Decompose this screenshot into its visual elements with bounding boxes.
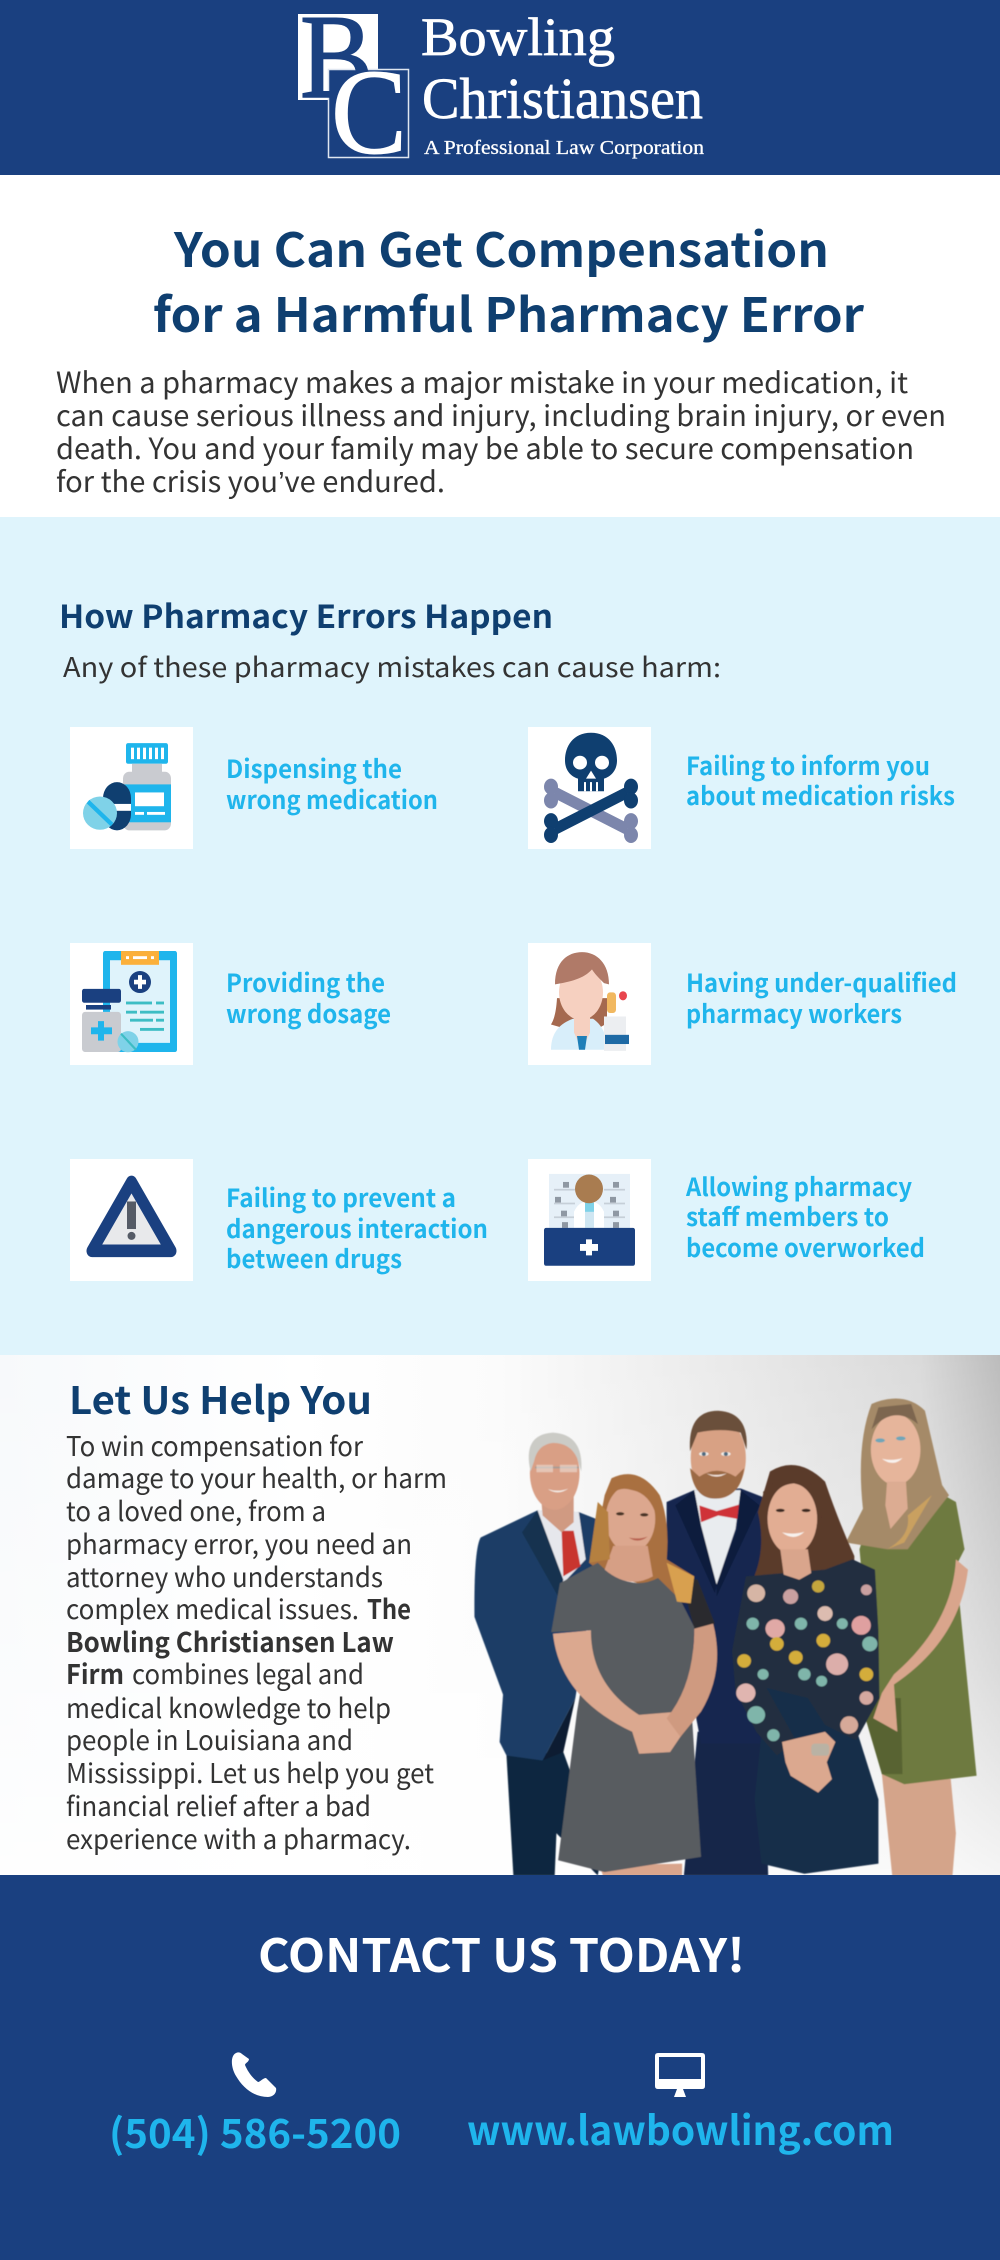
person: man with bow tie, back centre xyxy=(667,1411,768,1875)
item: under-qualified workers xyxy=(528,943,957,1065)
body text: Mississippi. Let us help you get xyxy=(66,1752,434,1791)
icon: pharmacist xyxy=(551,952,629,1051)
logo mark xyxy=(298,0,408,180)
section heading: How Pharmacy Errors Happen xyxy=(59,592,553,638)
item: providing the wrong dosage xyxy=(70,943,391,1065)
body text: To win compensation for xyxy=(66,1425,363,1464)
item text xyxy=(226,1179,488,1276)
body text: damage to your health, or harm xyxy=(66,1457,447,1496)
body text: experience with a pharmacy. xyxy=(66,1818,411,1857)
item text: Dispensing the xyxy=(226,750,402,786)
item text: between drugs xyxy=(226,1240,402,1276)
person: woman in green dress, right xyxy=(846,1399,977,1875)
header band xyxy=(0,0,1000,180)
panel: let us help you xyxy=(0,1355,1000,1875)
team photo illustration xyxy=(474,1398,978,1875)
item text: Failing to inform you xyxy=(686,747,930,783)
item text: dangerous interaction xyxy=(226,1210,488,1246)
icon: pharmacist at counter xyxy=(544,1174,635,1266)
item: dispensing the wrong medication xyxy=(70,727,438,849)
item text: pharmacy workers xyxy=(686,995,902,1031)
intro paragraph xyxy=(56,360,946,501)
person: older man, left xyxy=(474,1433,601,1875)
item text: Failing to prevent a xyxy=(226,1179,456,1215)
body text xyxy=(66,1425,447,1857)
item text: Having under-qualified xyxy=(686,964,957,1000)
item text: wrong dosage xyxy=(226,995,391,1031)
intro paragraph: can cause serious illness and injury, including brain injury, or even xyxy=(56,393,946,435)
icon: pill bottle and pills xyxy=(83,743,171,830)
intro paragraph: death. You and your family may be able to secure compensation xyxy=(56,426,914,468)
body text: Firm xyxy=(66,1653,124,1692)
icon: skull and crossbones xyxy=(544,733,638,843)
icon: clipboard and bottle xyxy=(82,951,177,1052)
item text xyxy=(226,964,391,1031)
body text: complex medical issues. xyxy=(66,1588,359,1627)
item text xyxy=(686,747,955,813)
intro paragraph: When a pharmacy makes a major mistake in your medication, it xyxy=(56,360,908,402)
logo wordmark: A Professional Law Corporation xyxy=(424,137,704,159)
section subheading: Any of these pharmacy mistakes can cause harm: xyxy=(63,646,721,685)
intro paragraph: for the crisis you’ve endured. xyxy=(56,459,445,501)
logo wordmark xyxy=(421,7,704,159)
icon: warning triangle xyxy=(92,1182,171,1251)
item text: about medication risks xyxy=(686,777,955,813)
icon: monitor xyxy=(655,2053,705,2097)
body text: medical knowledge to help xyxy=(66,1687,391,1726)
logo wordmark: Bowling xyxy=(421,7,615,67)
body text: financial relief after a bad xyxy=(66,1785,371,1824)
body text: The xyxy=(367,1588,411,1627)
person: woman in floral blouse, front right xyxy=(732,1465,879,1874)
logo wordmark: Christiansen xyxy=(422,66,703,131)
item text xyxy=(226,750,438,817)
item: overworked staff xyxy=(528,1159,925,1281)
item text: staff members to xyxy=(686,1198,889,1234)
logo mark: C xyxy=(331,45,407,180)
icon: phone xyxy=(232,2052,276,2097)
body text: pharmacy error, you need an xyxy=(66,1523,412,1562)
item: failing to prevent interaction xyxy=(70,1159,488,1281)
body text: Bowling Christiansen Law xyxy=(66,1621,394,1660)
person: woman in grey dress, front left xyxy=(551,1474,717,1875)
body text: attorney who understands xyxy=(66,1556,383,1595)
heading: contact us today: CONTACT US TODAY! xyxy=(258,1920,745,1986)
website: www.lawbowling.com xyxy=(467,2099,894,2157)
item text: Allowing pharmacy xyxy=(685,1168,913,1204)
panel: contact footer xyxy=(0,1875,1000,2260)
item text xyxy=(686,964,957,1031)
body text: to a loved one, from a xyxy=(66,1490,326,1529)
title xyxy=(153,212,865,346)
body text: people in Louisiana and xyxy=(66,1719,353,1758)
panel: how pharmacy errors happen xyxy=(0,517,1000,1355)
item text: Providing the xyxy=(226,964,385,1000)
heading: Let Us Help You xyxy=(69,1370,372,1425)
item: failing to inform you xyxy=(528,727,955,849)
item text: become overworked xyxy=(686,1229,925,1265)
title: for a Harmful Pharmacy Error xyxy=(153,277,865,346)
title: You Can Get Compensation xyxy=(173,212,829,281)
item text xyxy=(685,1168,925,1265)
body text: combines legal and xyxy=(132,1653,364,1692)
item text: wrong medication xyxy=(226,781,438,817)
phone number: (504) 586-5200 xyxy=(109,2102,401,2160)
